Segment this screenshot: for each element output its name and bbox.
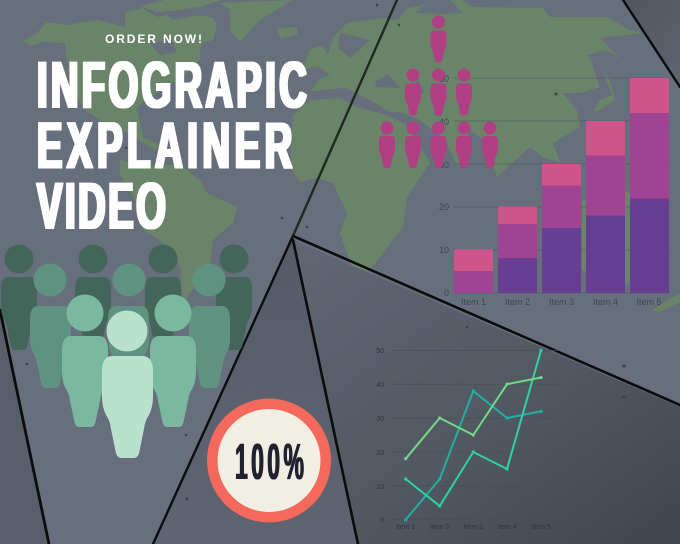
bars item 4 [586, 121, 625, 293]
x axis labels: Item 4 [593, 297, 618, 307]
black sea inlet [375, 74, 400, 88]
bars item 5 [630, 78, 669, 293]
shard: centre triangle [153, 238, 358, 544]
y axis labels: 40 [376, 382, 384, 389]
x axis labels: Item 3 [464, 524, 483, 531]
back row [1, 244, 252, 350]
x axis labels: Item 1 [461, 297, 486, 307]
series: teal [404, 389, 543, 521]
badge: 100% [207, 398, 331, 522]
japan [593, 72, 615, 112]
title: INFOGRAPIC [37, 50, 307, 122]
y axis labels: 40 [439, 117, 449, 127]
order now label: ORDER NOW! [105, 32, 202, 46]
x axis labels: Item 5 [531, 524, 551, 531]
x axis labels [461, 297, 662, 307]
series: light green [404, 376, 543, 460]
australia [582, 190, 668, 285]
title: VIDEO [37, 171, 166, 243]
y axis labels: 0 [380, 518, 384, 524]
y axis labels: 20 [439, 202, 449, 212]
gridlines [392, 350, 558, 520]
badge: 100%: 100% [235, 434, 304, 491]
x axis labels: Item 2 [505, 297, 530, 307]
icon: magenta people pyramid [379, 16, 498, 168]
y axis labels: 30 [376, 416, 384, 423]
x axis labels: Item 4 [497, 524, 517, 531]
title: EXPLAINER [37, 111, 292, 183]
south america [120, 160, 237, 330]
x axis labels [396, 524, 551, 531]
greenland [220, 0, 293, 42]
y axis labels: 10 [376, 484, 384, 491]
line chart [376, 348, 558, 531]
x axis labels: Item 2 [430, 524, 450, 531]
front row [62, 294, 196, 427]
shard: top right [623, 0, 680, 87]
shard: lower left [0, 310, 49, 544]
hudson bay [150, 40, 177, 55]
x axis labels: Item 5 [636, 297, 662, 307]
y axis labels: 50 [439, 74, 449, 84]
north sea inlet [338, 33, 370, 58]
eurasia [302, 0, 643, 177]
new zealand [652, 293, 680, 312]
x axis labels: Item 3 [549, 297, 574, 307]
arctic islands [140, 0, 222, 12]
bars item 2 [498, 206, 537, 293]
north america [0, 8, 217, 150]
bar chart [439, 74, 670, 307]
bars item 3 [542, 164, 581, 293]
series: mint [404, 349, 543, 508]
africa [290, 98, 430, 283]
y axis labels [376, 348, 384, 524]
iceland [277, 27, 297, 38]
y axis labels: 20 [376, 450, 384, 457]
shard: lower right [293, 240, 680, 544]
y axis labels [439, 74, 449, 298]
y axis labels: 50 [376, 348, 384, 355]
caspian inlet [412, 80, 424, 100]
y axis labels: 30 [439, 160, 449, 170]
y axis labels: 0 [444, 288, 449, 298]
y axis labels: 10 [439, 245, 449, 255]
middle row [30, 264, 230, 388]
title [37, 50, 307, 243]
icon: green crowd [1, 244, 252, 458]
gridlines [454, 78, 670, 293]
centre person [102, 310, 153, 458]
bars item 1 [454, 250, 493, 293]
x axis labels: Item 1 [396, 524, 416, 531]
world map [0, 0, 680, 330]
